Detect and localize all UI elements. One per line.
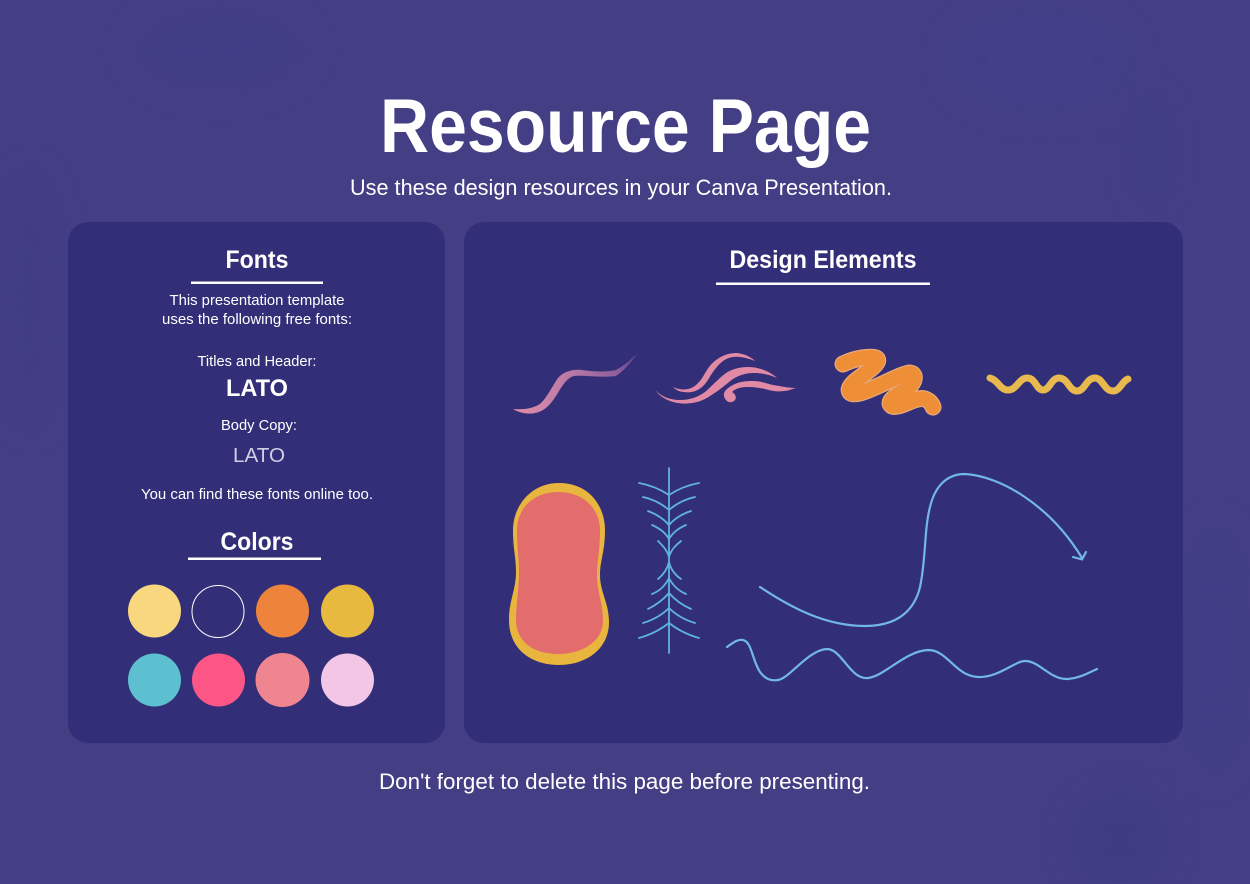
subtitle: Use these design resources in your Canva Presentation. — [350, 175, 892, 200]
label: titles and header: Titles and Header: — [198, 354, 316, 370]
heading: colors — [188, 528, 321, 560]
font name: bold: LATO — [226, 375, 288, 402]
heading: fonts — [191, 246, 323, 284]
label: body copy: Body Copy: — [221, 418, 297, 434]
blob: red with yellow border — [509, 483, 609, 665]
footer note: Don't forget to delete this page before presenting. — [379, 769, 870, 794]
brush stroke: orange scribble — [843, 357, 933, 407]
heading: colors: Colors — [220, 528, 294, 556]
squiggle: yellow — [990, 378, 1128, 391]
text block: fonts intro: uses the following free fonts: — [162, 312, 352, 328]
font name: light: LATO — [233, 445, 285, 467]
brush stroke: pink waves — [655, 353, 796, 404]
text block: fonts intro: This presentation template — [170, 293, 344, 309]
squiggle: blue wave — [727, 640, 1097, 680]
title: Resource Page — [380, 84, 871, 169]
panel: design elements — [464, 222, 1183, 743]
panel: fonts and colors — [68, 222, 445, 743]
heading: design elements: Design Elements — [730, 246, 916, 274]
heading: fonts: Fonts — [226, 246, 288, 274]
icon: fern divider — [639, 468, 699, 653]
color swatches — [128, 584, 374, 707]
text block: fonts intro — [162, 293, 352, 328]
arrow: curved — [760, 474, 1086, 626]
text block: fonts note: You can find these fonts online too. — [141, 487, 373, 503]
brush stroke: mauve — [513, 353, 638, 414]
